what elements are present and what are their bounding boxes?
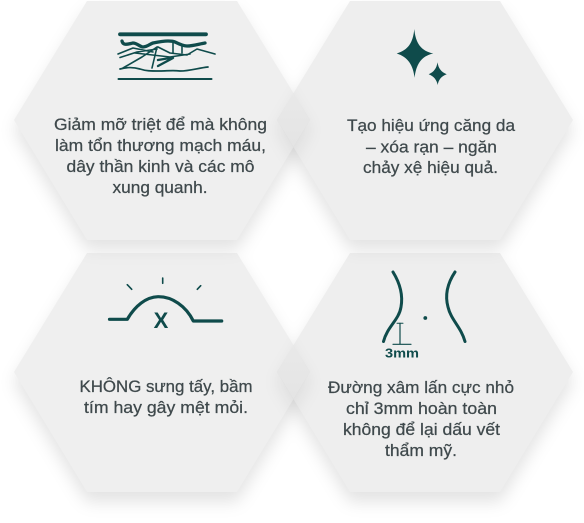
text: top left: làm tổn thương mạch máu,: [55, 136, 266, 155]
text: top left: Giảm mỡ triệt để mà không: [54, 115, 267, 134]
icon: skin layers with vessels and nerves: [118, 34, 215, 79]
text: bottom right: thẩm mỹ.: [385, 441, 457, 460]
text: top left: dây thần kinh và các mô: [66, 157, 255, 176]
icon: no swelling bump: X: [154, 308, 169, 333]
text: bottom left: KHÔNG sưng tấy, bầm: [80, 377, 252, 396]
icon: 3mm incision on abdomen: 3mm: [385, 346, 419, 360]
text: top left: xung quanh.: [112, 178, 208, 197]
panel: hexagon bottom right: [277, 253, 573, 492]
panel: hexagon bottom left: [14, 253, 310, 492]
text: top right: [347, 116, 516, 177]
text: bottom right: không để lại dấu vết: [343, 420, 500, 439]
text: bottom right: chỉ 3mm hoàn toàn: [346, 399, 497, 418]
icon: no swelling bump: [110, 278, 222, 333]
text: top right: – xóa rạn – ngăn: [366, 138, 497, 156]
text: top left: [54, 115, 267, 197]
text: bottom left: tím hay gây mệt mỏi.: [84, 398, 248, 417]
text: bottom right: Đường xâm lấn cực nhỏ: [328, 378, 514, 397]
text: top right: Tạo hiệu ứng căng da: [347, 116, 516, 135]
text: bottom right: [328, 378, 514, 460]
panel: hexagon top right: [277, 1, 573, 240]
overlap bottom: [277, 345, 310, 399]
icon: 3mm incision on abdomen: [384, 272, 465, 360]
panel: hexagon top left: [14, 1, 310, 240]
icon: sparkles: [397, 29, 447, 85]
overlap top: [277, 93, 310, 147]
text: bottom left: [80, 377, 252, 417]
text: top right: chảy xệ hiệu quả.: [363, 158, 498, 177]
